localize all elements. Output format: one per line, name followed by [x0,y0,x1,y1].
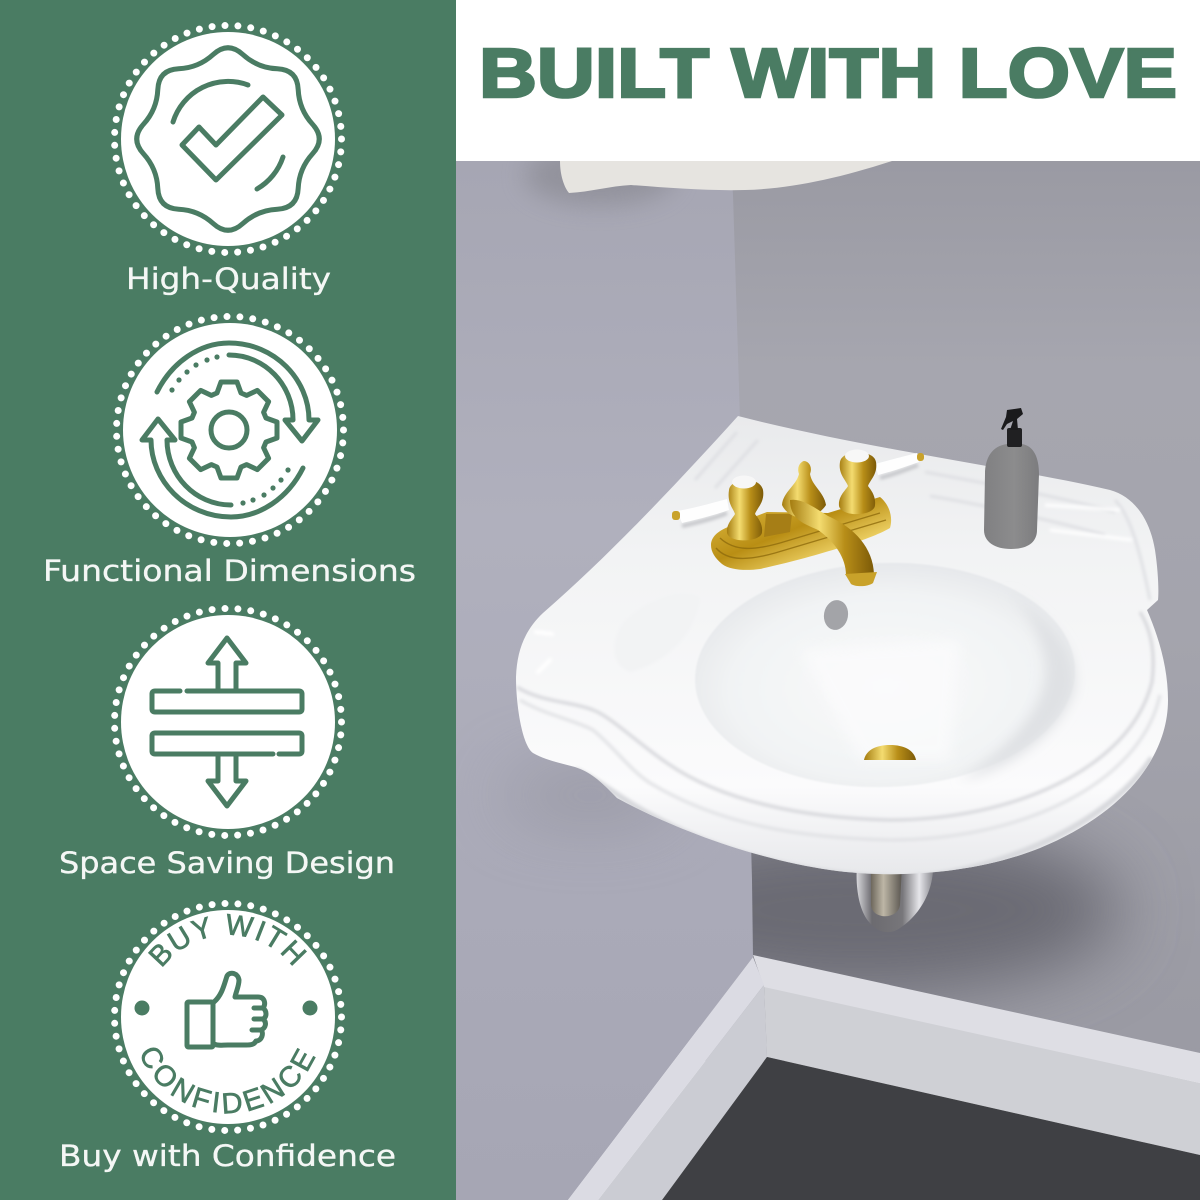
pipe inner [871,865,902,916]
wall: shadow below sink [600,825,1120,995]
icon: gear hub [211,412,247,448]
faucet hub [782,461,826,518]
arc path for top text [146,935,310,1017]
icon: bottom cycle arrow [142,419,303,517]
spout tip [845,572,877,586]
basin shading right [960,590,1075,780]
baseboard: right face [764,985,1200,1155]
arc path for bottom text [132,1017,324,1113]
dotted ring [114,608,342,836]
deck ripple 2 [715,440,758,488]
lever right [875,453,919,475]
deck ripple 5 [1115,500,1150,600]
overflow hole [822,598,850,632]
icon: up arrow [208,638,246,691]
wall: right wall [700,161,1200,1061]
finger lines [252,1008,263,1030]
drain [864,745,916,760]
baseboard: right lip [753,955,1200,1083]
handle right [839,452,876,514]
wall: left wall [456,161,753,1200]
soap bottle [984,408,1039,549]
cap right [845,450,869,462]
label: space saving design: Space Saving Design [59,846,395,880]
label: high quality: High-Quality [126,262,331,296]
badge: buy with confidence [111,900,345,1134]
icon: lower arc [257,157,283,189]
icon: top cycle arrow [157,343,318,441]
badge text: confidence: CONFIDENCE [142,1048,316,1114]
deck ripple 4 [930,496,1105,535]
baseboard: left lip [568,957,764,1200]
bottom arrow dots [240,467,291,506]
label: functional dimensions: Functional Dimensions [43,554,416,588]
panel: product photo of corner sink [456,145,1200,1200]
icon: gear [181,382,277,478]
left deck highlight [536,632,552,672]
floor [662,1057,1200,1200]
dotted ring [114,904,342,1130]
icon: down arrow [208,754,246,806]
spout [790,500,874,575]
badge: high quality [114,26,342,252]
faucet base plate [711,497,891,570]
badge: space saving design [114,608,342,836]
basin highlight [800,640,960,760]
wall: shadow near mirror [525,145,675,205]
icon: scalloped seal [137,48,319,230]
handle left [727,480,763,540]
base plate top surface [764,514,792,537]
deck ripple 3 [925,472,1115,512]
badge dot right [302,1000,318,1016]
left deck recess [614,593,700,672]
icon: thumbs up [187,973,266,1047]
lever shadows [682,465,918,526]
base plate tier lines [716,513,886,558]
dotted ring [114,26,342,252]
panel: green sidebar background [0,0,456,1200]
dotted ring [116,316,344,544]
bottle pump [1001,408,1023,430]
icon: top bar [152,691,302,712]
cap left [732,476,756,488]
label: buy with confidence: Buy with Confidence [59,1139,396,1173]
lever right tip [917,453,924,461]
wall mounted object at top [560,161,892,193]
sink rim ridges [517,612,1160,878]
panel: title band [456,0,1200,161]
deck white highlight [1045,505,1132,540]
sink basin [691,556,1079,794]
sink body [516,416,1168,874]
faucet [672,450,924,586]
icon: upper arc [173,81,248,122]
deck ripples [695,432,1150,600]
thumb and fist [214,973,266,1045]
wall: shadow beside sink [500,769,680,821]
baseboard: left face [598,985,767,1200]
icon: check mark [182,97,282,180]
sink rim lower ridge [520,695,1160,840]
lever left tip [672,511,680,520]
bottle collar [1007,428,1022,447]
icon: bottom bar [152,733,302,754]
title: BUILT WITH LOVE [479,34,1177,112]
top arrow dots [169,354,220,393]
badge text: buy with: BUY WITH [148,914,307,967]
badge: functional dimensions [116,316,344,544]
lever left [677,499,729,523]
p-trap pipe [857,865,933,932]
sink rim underside shade [575,758,1152,878]
badge dot left [134,1000,150,1016]
